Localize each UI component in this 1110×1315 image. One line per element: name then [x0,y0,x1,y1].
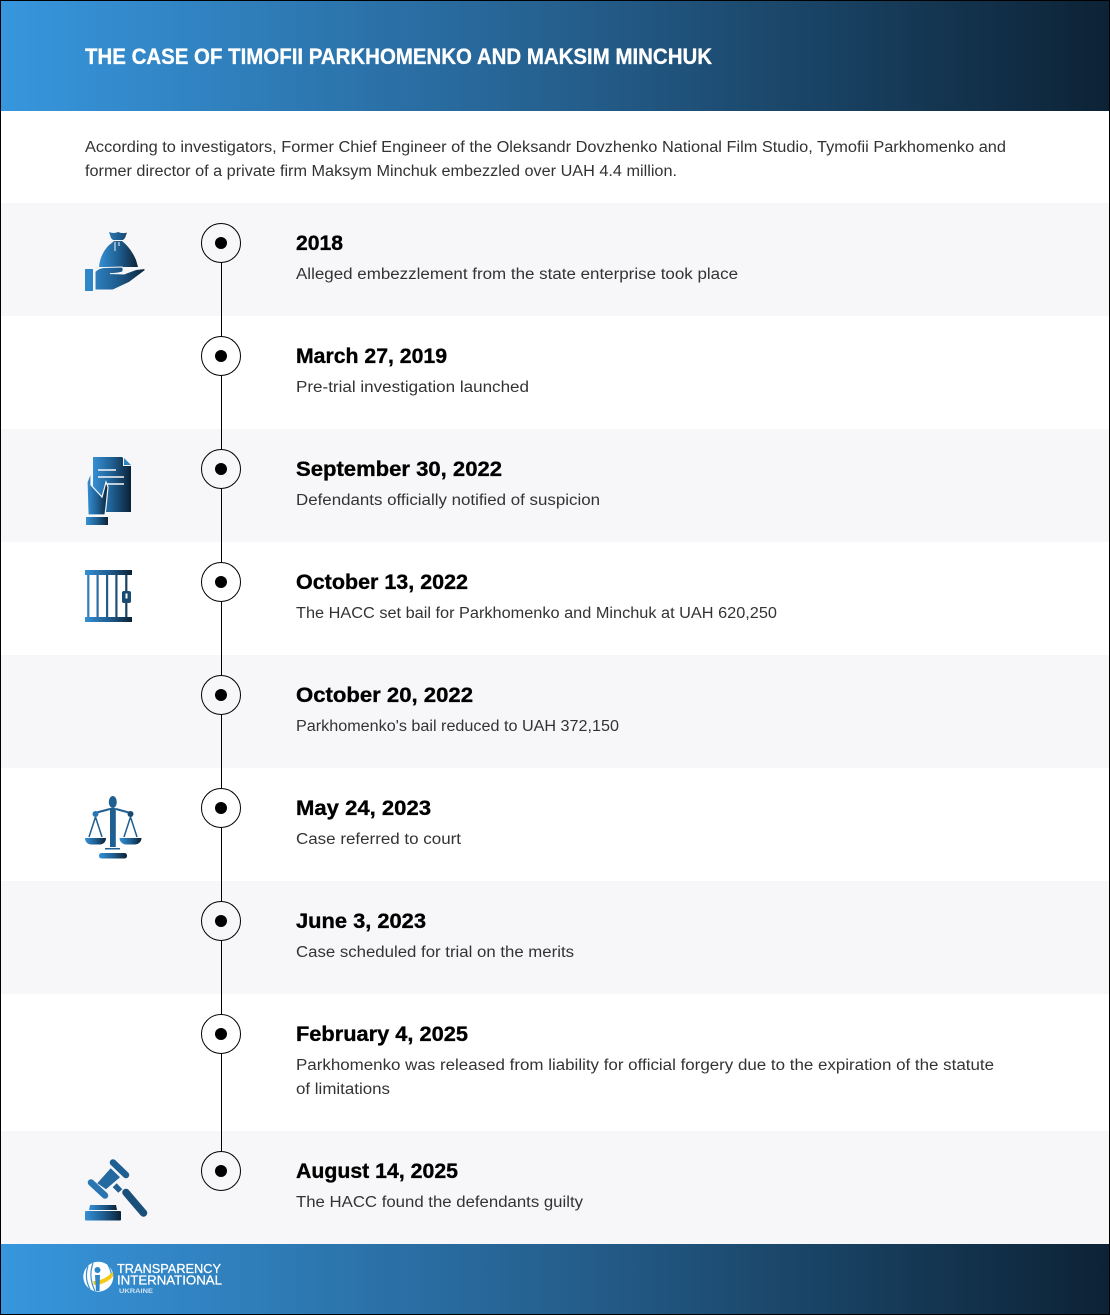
intro text [85,139,1006,180]
timeline event: March 27, 2019: Pre-trial investigation launched [296,379,529,396]
logo: Transparency International Ukraine: TRANSPARENCY [117,1261,221,1276]
timeline event: February 4, 2025: of limitations [296,1081,390,1098]
icon: money bag on hand [85,232,145,291]
timeline event: 2018 [202,224,738,283]
timeline event: June 3, 2023: Case scheduled for trial on the merits [296,944,574,961]
title: THE CASE OF TIMOFII PARKHOMENKO AND MAKSIM MINCHUK [85,44,712,69]
timeline event: June 3, 2023: June 3, 2023 [296,910,426,933]
timeline event: October 13, 2022 [202,562,777,622]
timeline event: August 14, 2025: The HACC found the defendants guilty [296,1194,583,1211]
timeline line [220,243,222,1171]
timeline event: February 4, 2025: Parkhomenko was released from liability for official forgery due to the expiration of the statute [296,1057,994,1074]
timeline event: 2018: 2018 [296,232,343,255]
logo: Transparency International Ukraine: UKRAINE [119,1288,154,1295]
timeline event: March 27, 2019 [202,336,529,396]
timeline event: February 4, 2025 [202,1014,994,1098]
icon: hand holding document [86,457,131,525]
logo: Transparency International Ukraine [83,1261,222,1295]
timeline event: May 24, 2023 [202,788,462,848]
icon: scales of justice [85,796,142,858]
timeline event: October 20, 2022 [202,676,619,735]
timeline event: February 4, 2025: February 4, 2025 [296,1023,468,1046]
footer band [1,1244,1110,1314]
timeline event: September 30, 2022: September 30, 2022 [296,458,502,481]
timeline event: October 13, 2022: The HACC set bail for Parkhomenko and Minchuk at UAH 620,250 [296,605,777,622]
icon: prison bars [85,570,132,622]
intro text: According to investigators, Former Chief Engineer of the Oleksandr Dovzhenko National Film Studio, Tymofii Parkhomenko and [85,139,1006,156]
timeline event: October 20, 2022: Parkhomenko's bail reduced to UAH 372,150 [296,718,619,735]
timeline event: June 3, 2023 [202,902,574,961]
logo: Transparency International Ukraine: INTERNATIONAL [117,1272,222,1288]
icon: gavel [85,1162,144,1220]
intro text: former director of a private firm Maksym Minchuk embezzled over UAH 4.4 million. [85,163,677,180]
timeline event: March 27, 2019: March 27, 2019 [296,345,447,368]
timeline event: May 24, 2023: Case referred to court [296,831,462,848]
timeline event: October 13, 2022: October 13, 2022 [296,571,468,594]
timeline event: August 14, 2025 [202,1152,583,1211]
timeline event: October 20, 2022: October 20, 2022 [296,684,473,707]
header band [1,1,1110,111]
timeline event: May 24, 2023: May 24, 2023 [296,797,431,820]
timeline event: September 30, 2022 [202,450,600,509]
timeline event: August 14, 2025: August 14, 2025 [296,1160,458,1183]
timeline event: 2018: Alleged embezzlement from the state enterprise took place [296,266,738,283]
timeline event: September 30, 2022: Defendants officially notified of suspicion [296,492,600,509]
